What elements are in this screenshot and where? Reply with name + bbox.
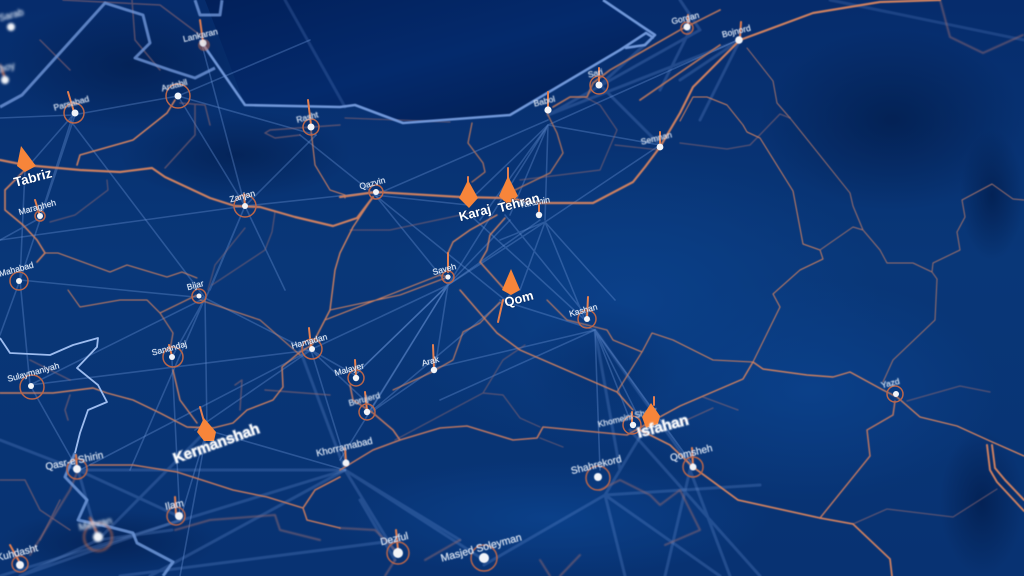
node: Sulaymaniyah [6, 360, 61, 399]
border: Iraq south [65, 453, 173, 576]
node: Sanandaj: Sanandaj [151, 339, 188, 358]
node: Isfahan: Isfahan [635, 412, 690, 442]
node: Mahabad [0, 260, 35, 290]
node: Ilam: Ilam [164, 498, 185, 513]
node: Malayer [333, 360, 365, 386]
node: Sari: Sari [587, 66, 604, 80]
node: Zanjan: Zanjan [228, 188, 256, 204]
node: Dezful: Dezful [379, 531, 409, 548]
node: Borujerd [347, 390, 381, 420]
node: Karaj: Karaj [457, 201, 492, 224]
node: Bojnord: Bojnord [721, 23, 752, 39]
node: Khomeini Shahr: Khomeini Shahr [597, 405, 658, 429]
node: Gorgan: Gorgan [670, 10, 700, 26]
node: Isfahan [635, 397, 690, 442]
node: Arak [420, 345, 441, 373]
border: north-west [0, 0, 222, 107]
node: Zanjan [228, 188, 256, 217]
node: Parsabad [52, 92, 90, 123]
node: Ardabil [160, 77, 190, 108]
node: left city [0, 60, 16, 84]
node: Qasr-e Shirin: Qasr-e Shirin [45, 450, 104, 473]
node: Sari [587, 66, 608, 94]
Caspian Sea [205, 0, 646, 123]
node: Rasht [295, 100, 320, 135]
node: Varamin [518, 194, 551, 218]
node: Qom: Qom [503, 288, 535, 310]
node: Qomsheh [669, 443, 714, 477]
node: Sanandaj [151, 339, 188, 367]
border: Iraq [0, 338, 107, 453]
borders [0, 0, 655, 576]
node: Lankaran: Lankaran [182, 26, 219, 44]
node: Hamadan [290, 328, 329, 359]
node: Kashan [568, 297, 599, 328]
node: Saveh [431, 253, 457, 283]
node: Ardabil: Ardabil [160, 77, 188, 93]
node: Lankaran [182, 20, 219, 51]
node: Kashan: Kashan [568, 301, 599, 319]
node: Babol: Babol [533, 94, 556, 109]
node: Mehran: Mehran [78, 516, 113, 533]
node: Tehran [496, 168, 541, 215]
node: Rasht: Rasht [295, 109, 320, 125]
node: Qomsheh: Qomsheh [669, 443, 714, 464]
node: Karaj [457, 177, 492, 224]
node: Khorramabad: Khorramabad [315, 436, 374, 459]
node: Saveh: Saveh [431, 261, 457, 277]
node: Semnan: Semnan [640, 129, 673, 147]
node: Qazvin [358, 175, 387, 199]
node: Shahrekord: Shahrekord [570, 454, 623, 477]
node: Yazd: Yazd [880, 376, 901, 390]
node: Hamadan: Hamadan [290, 331, 329, 351]
node: Babol [533, 92, 556, 114]
node: Ilam [164, 497, 185, 525]
node: Bijar: Bijar [186, 278, 205, 292]
border: northern coast [200, 0, 655, 123]
node: Malayer: Malayer [333, 360, 365, 378]
node: Qazvin: Qazvin [358, 175, 387, 191]
node: Tabriz [12, 146, 54, 190]
node: Borujerd: Borujerd [347, 390, 381, 408]
node: Bijar [186, 278, 206, 303]
node: Mehran [78, 516, 113, 551]
node: Parsabad: Parsabad [52, 93, 90, 113]
node: Arak: Arak [420, 354, 441, 368]
node: Qom [498, 269, 535, 322]
node: Shahrekord [570, 454, 623, 490]
node: Masjed Soleyman: Masjed Soleyman [439, 531, 523, 565]
node: Maragheh: Maragheh [17, 197, 57, 217]
node: Dezful [379, 530, 409, 564]
node: Tabriz: Tabriz [12, 165, 54, 190]
node: Gorgan [670, 10, 700, 34]
node: Kermanshah: Kermanshah [171, 420, 262, 467]
node: Sulaymaniyah: Sulaymaniyah [6, 360, 61, 384]
node: Tehran: Tehran [496, 190, 541, 215]
node: Yazd [880, 376, 903, 402]
node: Varamin: Varamin [518, 194, 551, 210]
